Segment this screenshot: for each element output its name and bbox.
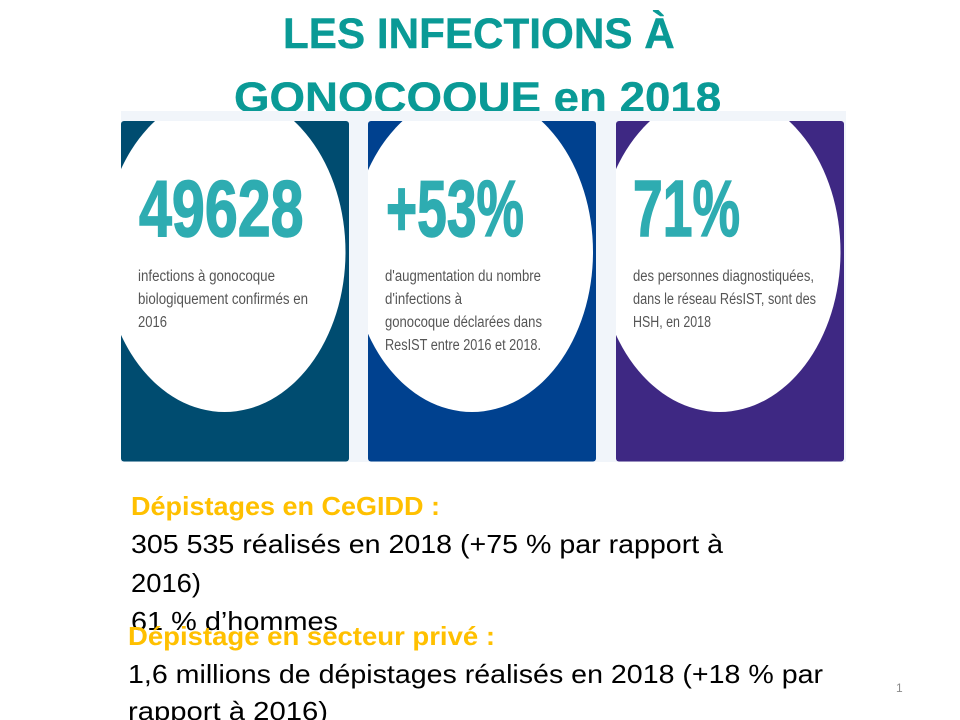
- stat number: 49628: 49628: [139, 163, 304, 253]
- stat description: infections: biologiquement confirmés en: [138, 291, 308, 308]
- stat description: increase: ResIST entre 2016 et 2018.: [385, 337, 541, 354]
- title: LES INFECTIONS À: [283, 10, 675, 58]
- stat number: +53%: +53%: [386, 164, 524, 254]
- stat description: HSH: [633, 268, 816, 331]
- text block: CeGIDD screening: 2016): [131, 568, 201, 598]
- stat description: increase: [385, 268, 542, 354]
- stat description: infections: [138, 268, 308, 331]
- text block: private sector screening: [128, 621, 823, 720]
- stat description: infections: 2016: [138, 314, 167, 331]
- stat description: infections: infections à gonocoque: [138, 268, 275, 285]
- stat number: 71%: 71%: [633, 164, 740, 254]
- text block: CeGIDD screening: 305 535 réalisés en 2018 (+75 % par rapport à: [131, 529, 724, 559]
- text block: CeGIDD screening: Dépistages en CeGIDD :: [131, 491, 440, 521]
- text block: private sector screening: Dépistage en secteur privé :: [128, 621, 495, 651]
- card: 49628 infections: [121, 121, 349, 462]
- title: [234, 10, 721, 122]
- stat description: HSH: des personnes diagnostiquées,: [633, 268, 814, 285]
- stat description: increase: gonocoque déclarées dans: [385, 314, 542, 331]
- stat description: HSH: dans le réseau RésIST, sont des: [633, 291, 816, 308]
- page number: 1: [896, 681, 903, 695]
- title: GONOCOQUE en 2018: [234, 74, 721, 122]
- text block: CeGIDD screening: [131, 491, 724, 636]
- stat description: increase: d'infections à: [385, 291, 462, 308]
- stat description: increase: d'augmentation du nombre: [385, 268, 541, 285]
- panel: key figures: [104, 92, 846, 462]
- text block: CeGIDD screening: 61 % d’hommes: [131, 606, 338, 636]
- text block: private sector screening: 1,6 millions de dépistages réalisés en 2018 (+18 % par: [128, 659, 823, 689]
- card: +53% increase: [368, 121, 596, 462]
- card: 71% HSH: [616, 121, 844, 462]
- stat description: HSH: HSH, en 2018: [633, 314, 711, 331]
